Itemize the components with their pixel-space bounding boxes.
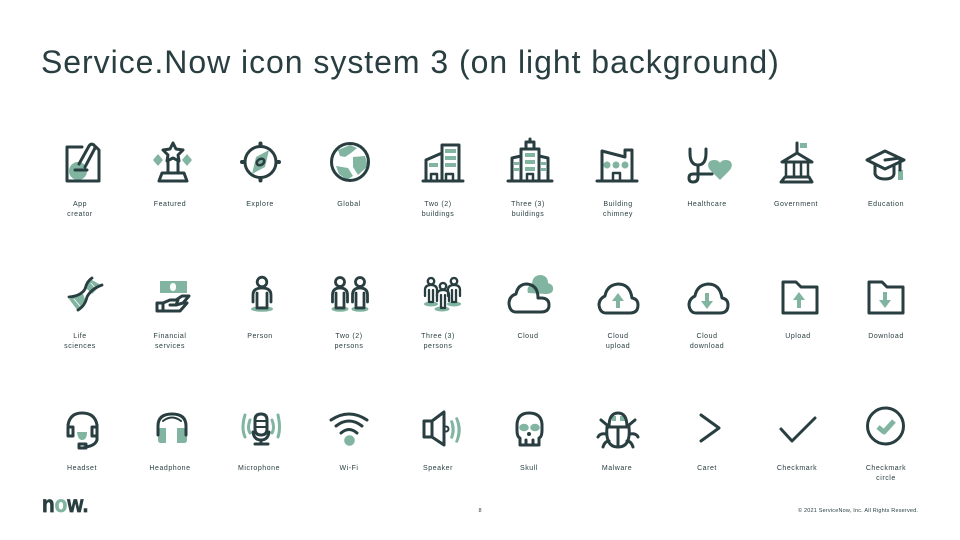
icon: wifi — [331, 414, 367, 446]
label: download: Download — [868, 333, 904, 340]
label: caret: Caret — [697, 465, 717, 472]
icon: headphone — [158, 414, 187, 443]
label: headset: Headset — [67, 465, 97, 472]
label: checkmark: Checkmark — [777, 465, 817, 472]
icon: checkmark — [781, 418, 815, 441]
icon: download folder — [869, 282, 903, 313]
icon: cloud — [509, 275, 553, 312]
label: checkmark circle: circle — [876, 475, 896, 482]
icon: healthcare — [689, 149, 732, 182]
logo: now: now. — [42, 491, 88, 517]
icon: two buildings — [423, 145, 463, 181]
label: app creator: creator — [67, 211, 93, 218]
label: featured: Featured — [154, 201, 186, 208]
label: cloud download: Cloud — [696, 333, 718, 340]
label: upload: Upload — [785, 333, 811, 340]
icon: cloud upload — [599, 284, 638, 313]
label: cloud download: download — [690, 343, 724, 350]
icon: government — [781, 143, 812, 182]
label: life sciences: sciences — [64, 343, 96, 350]
label: explore: Explore — [246, 201, 274, 208]
icon: person — [251, 277, 273, 312]
label: person: Person — [247, 333, 273, 340]
icon: three buildings — [508, 139, 552, 181]
icon: three persons — [424, 278, 461, 312]
icon: skull — [517, 413, 542, 445]
label: cloud: Cloud — [517, 333, 539, 340]
label: financial services: Financial — [154, 333, 186, 340]
label: building chimney: Building — [603, 201, 633, 208]
label: three buildings: Three (3) — [511, 201, 545, 208]
icon: headset — [68, 413, 97, 448]
label: wifi: Wi-Fi — [339, 465, 359, 472]
icon: featured — [153, 143, 192, 181]
label: three buildings: buildings — [512, 211, 544, 218]
label: healthcare: Healthcare — [687, 201, 727, 208]
label: two persons: Two (2) — [335, 333, 363, 340]
label: three persons: Three (3) — [421, 333, 455, 340]
label: malware: Malware — [602, 465, 632, 472]
label: headphone: Headphone — [149, 465, 191, 472]
label: two buildings: Two (2) — [424, 201, 452, 208]
label: cloud upload: upload — [606, 343, 630, 350]
icon: malware — [598, 413, 638, 447]
copyright: © 2021 ServiceNow, Inc. All Rights Reserved. — [798, 507, 918, 514]
label: three persons: persons — [424, 343, 452, 350]
label: two persons: persons — [335, 343, 363, 350]
label: app creator: App — [73, 201, 87, 208]
icon: education — [867, 151, 904, 180]
icon: microphone — [243, 414, 280, 444]
icon: cloud download — [689, 284, 728, 313]
label: life sciences: Life — [73, 333, 87, 340]
label: government: Government — [774, 201, 818, 208]
label: global: Global — [337, 201, 361, 208]
icon: speaker — [424, 412, 461, 445]
icon: upload folder — [783, 282, 817, 313]
label: microphone: Microphone — [238, 465, 280, 472]
page number: 8 — [478, 508, 482, 514]
icon: global — [332, 144, 368, 180]
label: skull: Skull — [520, 465, 538, 472]
icon: app creator — [67, 144, 99, 181]
label: cloud upload: Cloud — [607, 333, 629, 340]
label: two buildings: buildings — [422, 211, 454, 218]
icon: explore — [242, 144, 279, 180]
label: speaker: Speaker — [423, 465, 453, 472]
label: checkmark circle: Checkmark — [866, 465, 906, 472]
label: education: Education — [868, 201, 904, 208]
icon: caret — [701, 415, 719, 441]
icon: financial services — [157, 281, 189, 311]
title: Service.Now icon system 3 (on light background) — [41, 44, 780, 80]
label: financial services: services — [155, 343, 185, 350]
icon: life sciences — [69, 278, 102, 311]
icon: building chimney — [597, 150, 637, 181]
icon: two persons — [332, 278, 368, 312]
icon: checkmark circle — [868, 408, 904, 444]
label: building chimney: chimney — [603, 211, 633, 218]
